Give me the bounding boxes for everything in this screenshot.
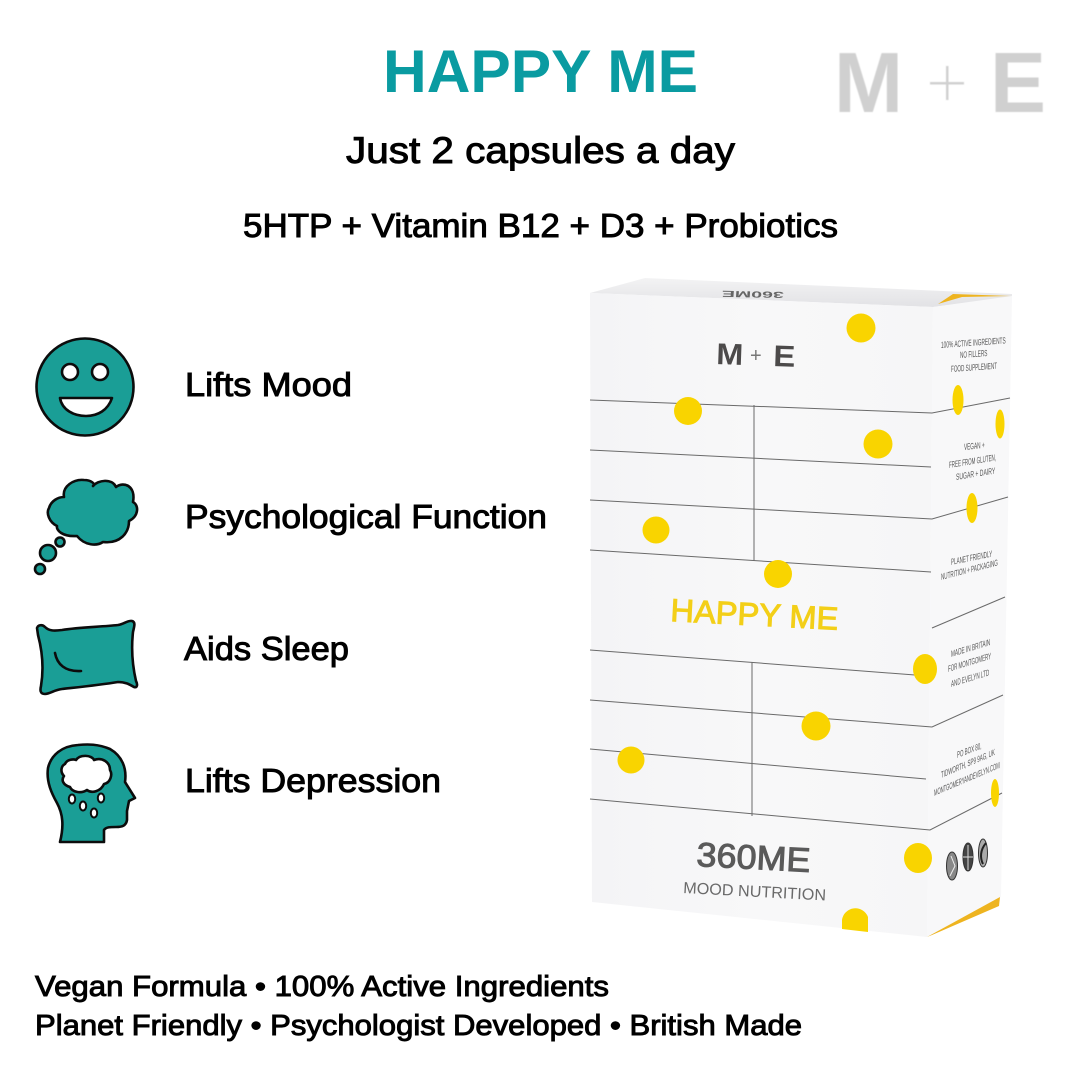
box top lettering: 360ME [721,289,784,300]
label: psychological function: Psychological Function [185,498,547,535]
icon: pillow [37,621,137,694]
logo: M + E [834,36,1046,131]
subtitle: Just 2 capsules a day [346,130,736,171]
box brand logo: E [773,340,796,374]
label: aids sleep: Aids Sleep [184,630,349,667]
claims line 2: Planet Friendly • Psychologist Developed • British Made [35,1010,802,1042]
box side panel copy: AND EVELYN LTD [951,667,989,689]
product box [590,278,1012,937]
box certification icons [946,839,988,880]
box side panel copy: MONTGOMERYANDEVELYN.COM [934,760,1000,798]
top flap: yellow inner [938,294,1011,304]
box brand name: 360ME [696,836,811,880]
box side panel copy: 100% ACTIVE INGREDIENTS [941,335,1006,350]
box side panel copy: FOOD SUPPLEMENT [951,361,997,374]
box side panel copy: VEGAN + [964,440,985,452]
ingredients line: 5HTP + Vitamin B12 + D3 + Probiotics [243,207,838,244]
icon: head with rain cloud [48,744,135,842]
title: HAPPY ME [383,38,698,105]
footer claims [35,971,802,1042]
box side panel copy: TIDWORTH, SP9 9AG, UK [941,747,995,780]
box product name: HAPPY ME [670,592,839,637]
box front face [590,293,933,937]
box side panel copy: FREE FROM GLUTEN, [949,452,996,470]
box side panel copy [934,335,1006,798]
box brand logo [716,338,796,374]
box side panel copy: FOR MONTGOMERY [948,651,991,674]
icon: smiling face [36,338,134,436]
box side panel copy: NUTRITION + PACKAGING [941,558,998,582]
box top face [590,278,1012,307]
logo: M + E: M [834,36,903,131]
box brand logo: M [716,338,744,372]
logo: M + E: E [990,36,1046,131]
yellow dots [618,314,1004,932]
box side panel copy: SUGAR + DAIRY [956,466,995,482]
box side panel copy: NO FILLERS [960,348,987,360]
label: lifts depression: Lifts Depression [185,762,441,799]
label: lifts mood: Lifts Mood [185,366,352,403]
bottom flap: yellow [927,897,1000,937]
box side panel copy: PO BOX 80, [957,741,982,760]
claims line 1: Vegan Formula • 100% Active Ingredients [35,971,609,1003]
box side panel copy: MADE IN BRITAIN [951,637,990,659]
box side face [927,296,1012,937]
box side panel copy: PLANET FRIENDLY [951,549,992,567]
box line pattern [590,398,1010,830]
benefit list [35,338,547,842]
box brand logo: + [750,345,762,367]
icon: thought cloud [35,480,137,574]
box tagline: MOOD NUTRITION [683,880,826,904]
